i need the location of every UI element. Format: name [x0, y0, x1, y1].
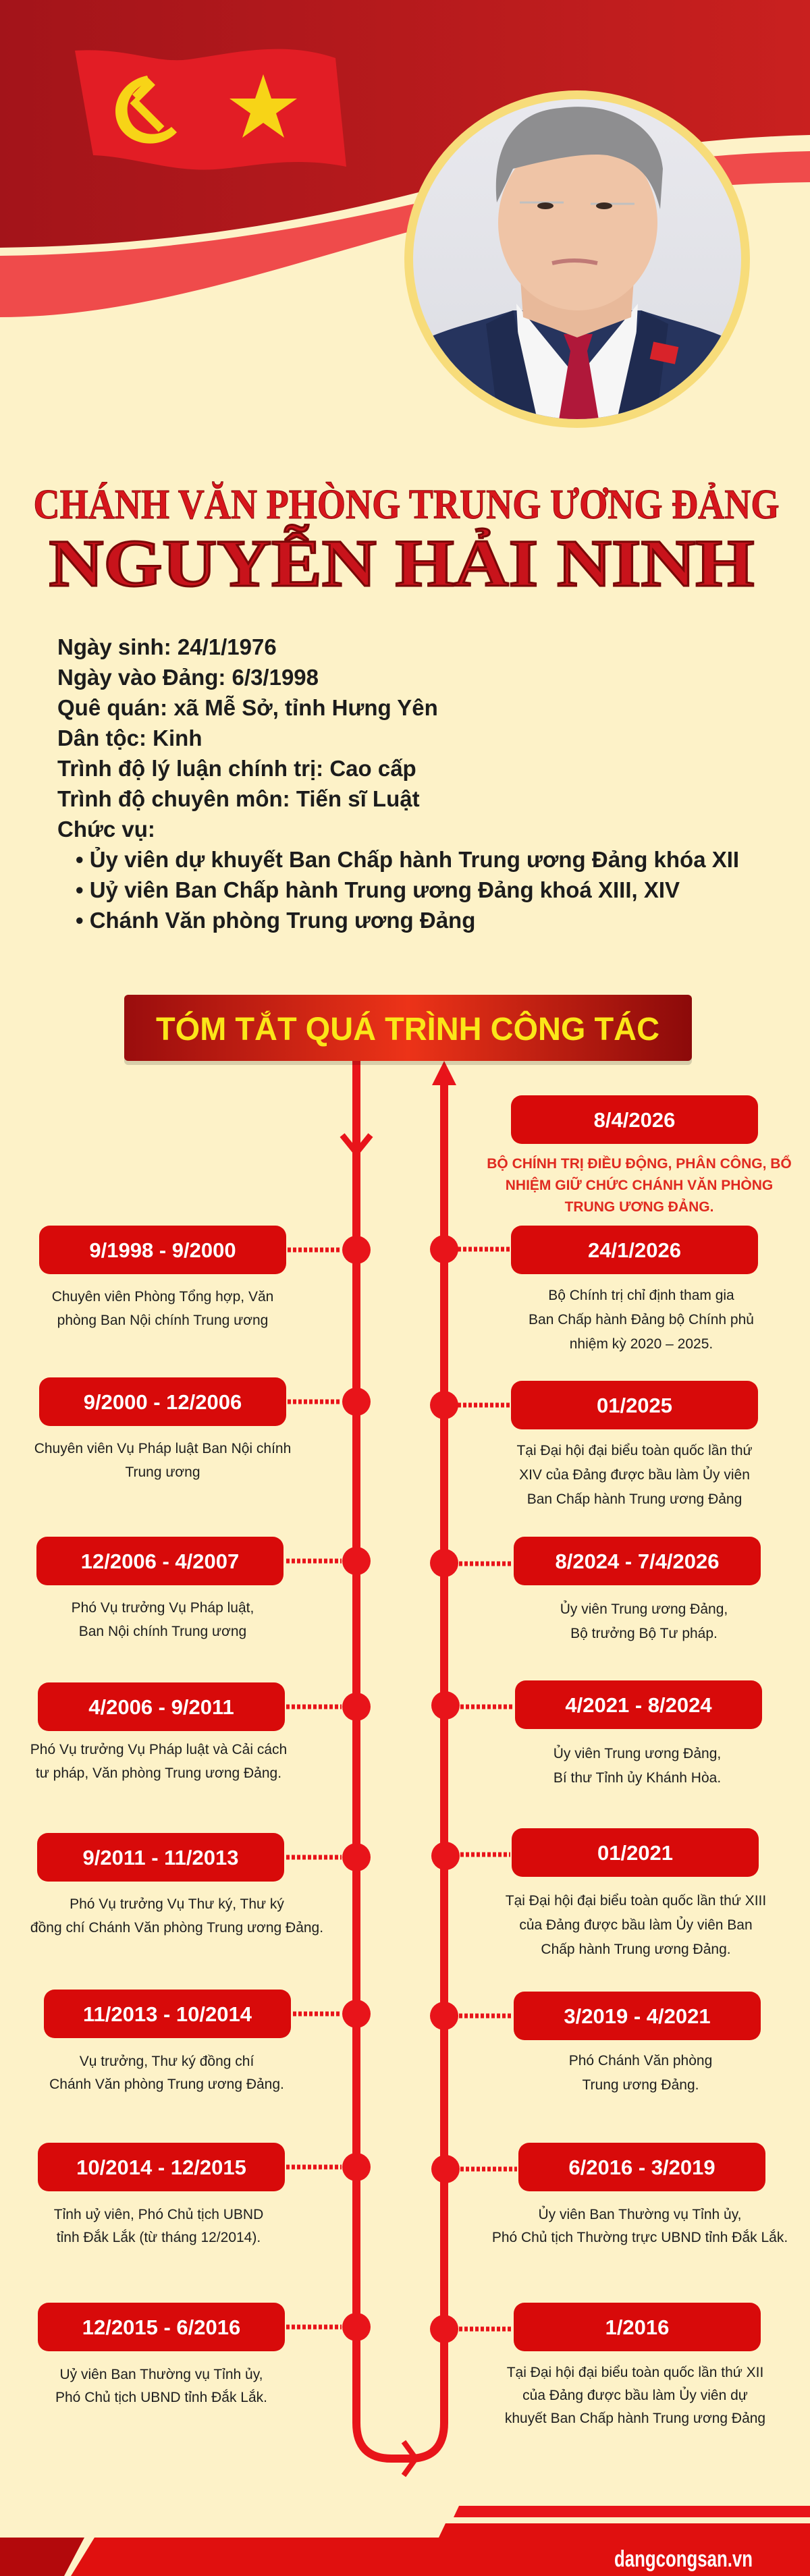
right timeline items: Bộ trưởng Bộ Tư pháp. — [570, 1626, 718, 1641]
left timeline items: Phó Vụ trưởng Vụ Pháp luật, — [72, 1600, 254, 1616]
personal info text: Quê quán: xã Mễ Sở, tỉnh Hưng Yên — [57, 695, 438, 720]
right timeline items: Ban Chấp hành Đảng bộ Chính phủ — [529, 1312, 754, 1327]
footer: source: dangcongsan.vn — [614, 2546, 753, 2572]
left timeline items: Vụ trưởng, Thư ký đồng chí — [80, 2054, 254, 2069]
right timeline items: 01/2021 — [597, 1841, 673, 1865]
personal info text: Chức vụ: — [57, 817, 155, 842]
right timeline items: Ủy viên Trung ương Đảng, — [554, 1745, 721, 1761]
left timeline items: tư pháp, Văn phòng Trung ương Đảng. — [36, 1765, 281, 1781]
left timeline items: Chánh Văn phòng Trung ương Đảng. — [49, 2077, 284, 2092]
personal info text: Trình độ chuyên môn: Tiến sĩ Luật — [57, 786, 420, 811]
personal info text: • Uỷ viên Ban Chấp hành Trung ương Đảng khoá XIII, XIV — [76, 877, 680, 902]
personal info text: Dân tộc: Kinh — [57, 725, 202, 750]
right timeline items: TRUNG ƯƠNG ĐẢNG. — [565, 1199, 713, 1215]
right timeline items: 4/2021 - 8/2024 — [565, 1693, 712, 1717]
right timeline items: Ban Chấp hành Trung ương Đảng — [527, 1491, 742, 1507]
left timeline items: Uỷ viên Ban Thường vụ Tỉnh ủy, — [60, 2367, 263, 2382]
right timeline items: khuyết Ban Chấp hành Trung ương Đảng — [505, 2411, 765, 2426]
left timeline items: Chuyên viên Phòng Tổng hợp, Văn — [52, 1289, 273, 1305]
icon: star — [230, 74, 297, 138]
right timeline items: Tại Đại hội đại biểu toàn quốc lần thứ — [516, 1443, 753, 1458]
timeline line with arrows — [342, 1061, 456, 2475]
right timeline items: 8/2024 - 7/4/2026 — [555, 1550, 720, 1573]
right timeline items: NHIỆM GIỮ CHỨC CHÁNH VĂN PHÒNG — [506, 1177, 773, 1193]
left timeline items: Chuyên viên Vụ Pháp luật Ban Nội chính — [34, 1441, 291, 1456]
right timeline items — [430, 1095, 792, 2426]
left timeline items: Ban Nội chính Trung ương — [79, 1624, 246, 1639]
personal info text: • Chánh Văn phòng Trung ương Đảng — [76, 908, 475, 933]
left timeline items: 9/1998 - 9/2000 — [89, 1238, 236, 1262]
left timeline items: 12/2006 - 4/2007 — [81, 1550, 239, 1573]
right timeline items: Chấp hành Trung ương Đảng. — [541, 1942, 731, 1957]
right timeline items: Phó Chủ tịch Thường trực UBND tỉnh Đắk Lắk. — [492, 2230, 788, 2245]
left timeline items: Trung ương — [125, 1464, 200, 1480]
left timeline items: 4/2006 - 9/2011 — [88, 1695, 234, 1719]
left timeline items: Phó Vụ trưởng Vụ Pháp luật và Cải cách — [30, 1742, 287, 1757]
portrait photo — [404, 90, 750, 445]
left timeline items: đồng chí Chánh Văn phòng Trung ương Đảng. — [30, 1920, 323, 1936]
right timeline items: BỘ CHÍNH TRỊ ĐIỀU ĐỘNG, PHÂN CÔNG, BỔ — [487, 1155, 792, 1172]
footer band — [0, 2506, 810, 2576]
right timeline items: Trung ương Đảng. — [583, 2077, 699, 2093]
section heading — [124, 995, 692, 1065]
left timeline items — [30, 1226, 371, 2405]
right timeline items: Bí thư Tỉnh ủy Khánh Hòa. — [554, 1770, 721, 1786]
right timeline items: Phó Chánh Văn phòng — [569, 2053, 712, 2068]
left timeline items: phòng Ban Nội chính Trung ương — [57, 1313, 268, 1328]
left timeline items: Phó Chủ tịch UBND tỉnh Đắk Lắk. — [55, 2390, 267, 2405]
left timeline items: tỉnh Đắk Lắk (từ tháng 12/2014). — [57, 2230, 261, 2245]
left timeline items: 11/2013 - 10/2014 — [83, 2002, 252, 2026]
right timeline items: của Đảng được bầu làm Ủy viên Ban — [519, 1917, 753, 1933]
right timeline items: của Đảng được bầu làm Ủy viên dự — [522, 2387, 748, 2403]
right timeline items: Bộ Chính trị chỉ định tham gia — [548, 1288, 734, 1303]
section heading: TÓM TẮT QUÁ TRÌNH CÔNG TÁC — [156, 1010, 659, 1047]
left timeline items: 10/2014 - 12/2015 — [76, 2156, 246, 2179]
personal info text: Trình độ lý luận chính trị: Cao cấp — [57, 756, 416, 781]
right timeline items: 8/4/2026 — [594, 1108, 675, 1132]
right timeline items: Ủy viên Trung ương Đảng, — [560, 1601, 728, 1617]
right timeline items: Tại Đại hội đại biểu toàn quốc lần thứ XII — [507, 2365, 763, 2380]
right timeline items: 1/2016 — [605, 2315, 669, 2339]
right timeline items: XIV của Đảng được bầu làm Ủy viên — [519, 1467, 750, 1483]
left timeline items: Tỉnh uỷ viên, Phó Chủ tịch UBND — [54, 2207, 263, 2222]
right timeline items: 24/1/2026 — [588, 1238, 681, 1262]
left timeline items: 12/2015 - 6/2016 — [82, 2315, 240, 2339]
right timeline items: 01/2025 — [597, 1394, 672, 1417]
icon: hammer and sickle — [115, 76, 177, 144]
title: name: NGUYỄN HẢI NINH — [49, 525, 755, 601]
right timeline items: Tại Đại hội đại biểu toàn quốc lần thứ XIII — [506, 1893, 766, 1909]
right timeline items: 3/2019 - 4/2021 — [564, 2004, 711, 2028]
right timeline items: 6/2016 - 3/2019 — [568, 2156, 716, 2179]
left timeline items: 9/2000 - 12/2006 — [84, 1390, 242, 1414]
personal info text: Ngày sinh: 24/1/1976 — [57, 634, 277, 659]
personal info text — [57, 634, 739, 933]
header background wave — [0, 0, 810, 317]
right timeline items: Ủy viên Ban Thường vụ Tỉnh ủy, — [539, 2206, 741, 2222]
right timeline items: nhiệm kỳ 2020 – 2025. — [570, 1336, 713, 1352]
left timeline items: Phó Vụ trưởng Vụ Thư ký, Thư ký — [70, 1896, 284, 1912]
personal info text: • Ủy viên dự khuyết Ban Chấp hành Trung ương Đảng khóa XII — [76, 847, 739, 872]
icon: party flag — [75, 49, 346, 170]
left timeline items: 9/2011 - 11/2013 — [82, 1846, 239, 1869]
personal info text: Ngày vào Đảng: 6/3/1998 — [57, 665, 319, 690]
